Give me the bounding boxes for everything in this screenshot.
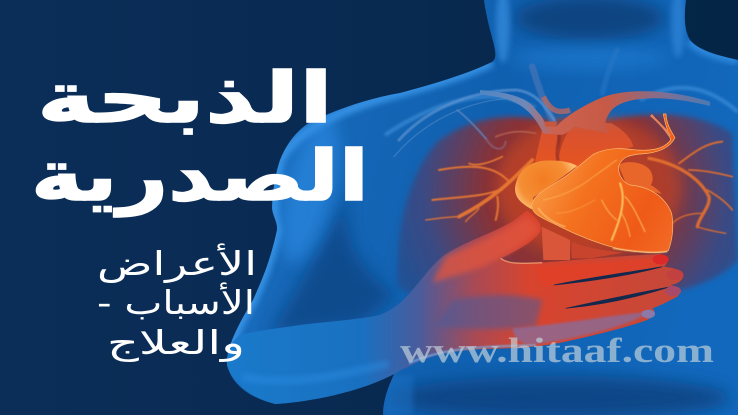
hand on chest [227, 211, 683, 404]
title: angina pectoris: الصدرية [31, 135, 369, 217]
illustration: human torso with glowing heart [227, 0, 738, 415]
shading shapes [269, 0, 730, 415]
heart: left atrium [618, 162, 662, 194]
rim light [227, 62, 492, 365]
subtitle: symptoms, causes, treatment: الأعراض [97, 243, 257, 284]
subtitle: symptoms, causes, treatment: والعلاج [107, 323, 245, 363]
body shading and anatomy [227, 0, 738, 415]
finger gaps [554, 267, 662, 285]
heart: coronary veins [538, 160, 667, 252]
subtitle: symptoms, causes, treatment [97, 243, 257, 363]
torso silhouette [227, 0, 738, 415]
right lung vessels [649, 142, 732, 233]
left lung vessels [426, 110, 536, 222]
title: angina pectoris [31, 57, 369, 217]
heart glow [496, 117, 682, 257]
subtitle: symptoms, causes, treatment: الأسباب - [97, 282, 255, 322]
title: angina pectoris: الذبحة [37, 57, 333, 139]
heart: ventricles with coronary trunk [532, 114, 675, 253]
fingernails [653, 254, 669, 264]
collarbones [385, 88, 738, 135]
neck vessels [394, 50, 617, 157]
watermark: website address: www.hitaaf.com [400, 331, 714, 370]
heart: right atrium [515, 161, 577, 209]
heart group (local coordinates) [480, 90, 710, 260]
great vessels [480, 90, 710, 260]
chest and lung cavity [397, 115, 738, 300]
